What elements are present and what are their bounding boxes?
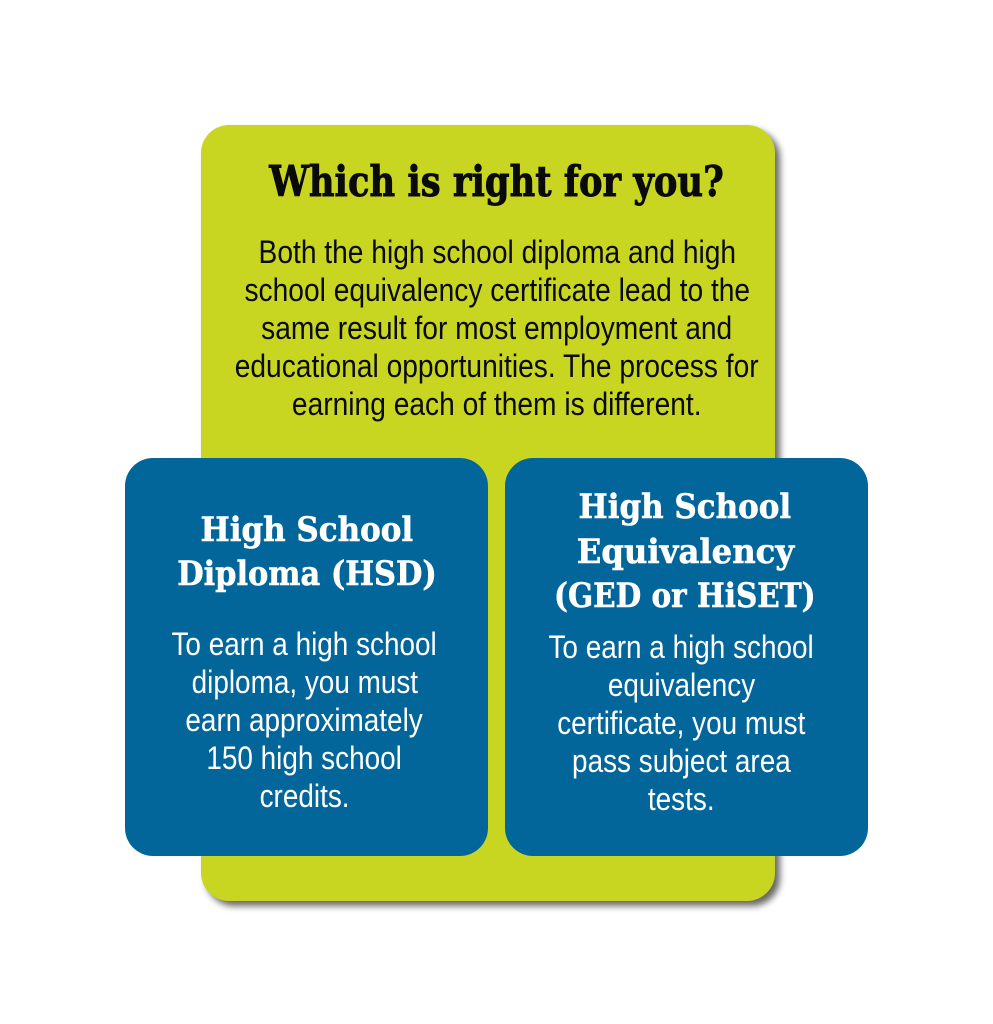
heading: High School Diploma: Diploma (HSD): [177, 554, 436, 594]
heading: High School Equivalency: High School: [579, 487, 791, 527]
text: diploma description: 150 high school: [207, 740, 402, 776]
text: equivalency description: pass subject area: [572, 743, 790, 779]
heading: High School Equivalency: [554, 487, 816, 616]
intro text: school equivalency certificate lead to the: [244, 272, 750, 308]
text: equivalency description: certificate, you must: [557, 705, 805, 741]
intro text: educational opportunities. The process for: [235, 348, 759, 384]
panel: green background card: [201, 125, 775, 901]
heading: High School Diploma: [177, 510, 436, 594]
heading: High School Diploma: High School: [200, 510, 413, 550]
text: diploma description: earn approximately: [186, 702, 423, 738]
panel: High School Diploma: [125, 458, 488, 856]
panel: High School Equivalency: [505, 458, 868, 856]
intro text: same result for most employment and: [261, 310, 733, 346]
title: Which is right for you?: [270, 157, 724, 206]
text: equivalency description: To earn a high school: [548, 629, 814, 665]
intro text: earning each of them is different.: [292, 386, 702, 422]
text: diploma description: To earn a high school: [172, 626, 437, 662]
heading: High School Equivalency: Equivalency: [576, 532, 794, 572]
heading: High School Equivalency: (GED or HiSET): [554, 576, 816, 616]
intro text: Both the high school diploma and high: [258, 234, 736, 270]
text: equivalency description: equivalency: [607, 667, 755, 703]
text: diploma description: [172, 626, 437, 814]
text: equivalency description: [548, 629, 814, 817]
text: equivalency description: tests.: [648, 781, 714, 817]
text: diploma description: credits.: [260, 778, 349, 814]
intro text: [235, 234, 759, 422]
text: diploma description: diploma, you must: [191, 664, 418, 700]
